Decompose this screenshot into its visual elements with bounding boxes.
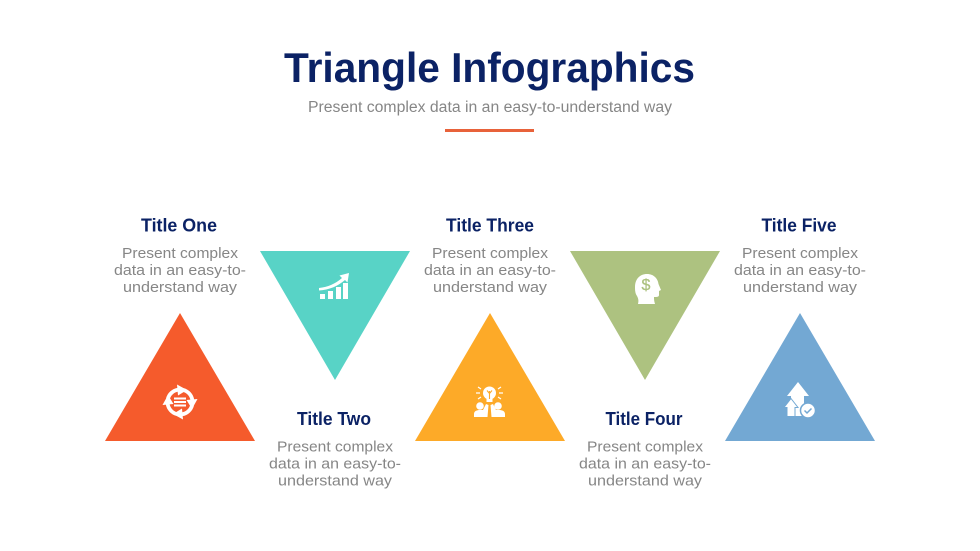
text block: five: data in an easy-to-: [734, 262, 866, 279]
text block: four: data in an easy-to-: [579, 456, 711, 472]
triangle: yellow: [415, 313, 565, 441]
triangle: blue: [725, 313, 875, 441]
triangle: green: [570, 251, 720, 380]
panel: title three: [415, 216, 565, 441]
heading: title four: Title Four: [606, 409, 682, 429]
heading: title two: Title Two: [297, 409, 371, 429]
icon: light bulb with people: [474, 386, 505, 417]
text block: one: Present complex: [122, 245, 239, 262]
panel: title five: [725, 216, 875, 441]
text block: four: [579, 438, 711, 490]
heading: title five: Title Five: [762, 216, 836, 236]
icon: rising bar chart: [319, 273, 349, 299]
text block: three: [424, 245, 556, 296]
subtitle: Present complex data in an easy-to-understand way: [308, 99, 672, 116]
panel: title two: [260, 251, 410, 490]
title: Triangle Infographics: [284, 44, 695, 91]
text block: two: Present complex: [277, 438, 394, 456]
icon: head with dollar: $: [642, 277, 651, 294]
text block: one: data in an easy-to-: [114, 262, 246, 279]
triangle: orange: [105, 313, 255, 441]
text block: two: data in an easy-to-: [269, 456, 401, 472]
text block: two: [269, 438, 401, 490]
text block: one: understand way: [123, 279, 238, 296]
icon: head with dollar: [635, 274, 661, 304]
triangle: teal: [260, 251, 410, 380]
icon: up arrows with check: [784, 382, 816, 418]
accent rule: [445, 129, 534, 132]
text block: four: Present complex: [587, 438, 704, 456]
text block: three: data in an easy-to-: [424, 262, 556, 279]
text block: five: [734, 245, 866, 296]
heading: title three: Title Three: [446, 216, 534, 236]
panel: title one: [105, 216, 255, 441]
text block: two: understand way: [278, 472, 393, 490]
text block: five: understand way: [743, 279, 858, 296]
text block: three: Present complex: [432, 245, 549, 262]
text block: three: understand way: [433, 279, 548, 296]
heading: title one: Title One: [141, 216, 217, 236]
panel: title four: [570, 251, 720, 490]
icon: circular arrows with list: [162, 384, 198, 420]
text block: one: [114, 245, 246, 296]
text block: five: Present complex: [742, 245, 859, 262]
text block: four: understand way: [588, 472, 703, 490]
